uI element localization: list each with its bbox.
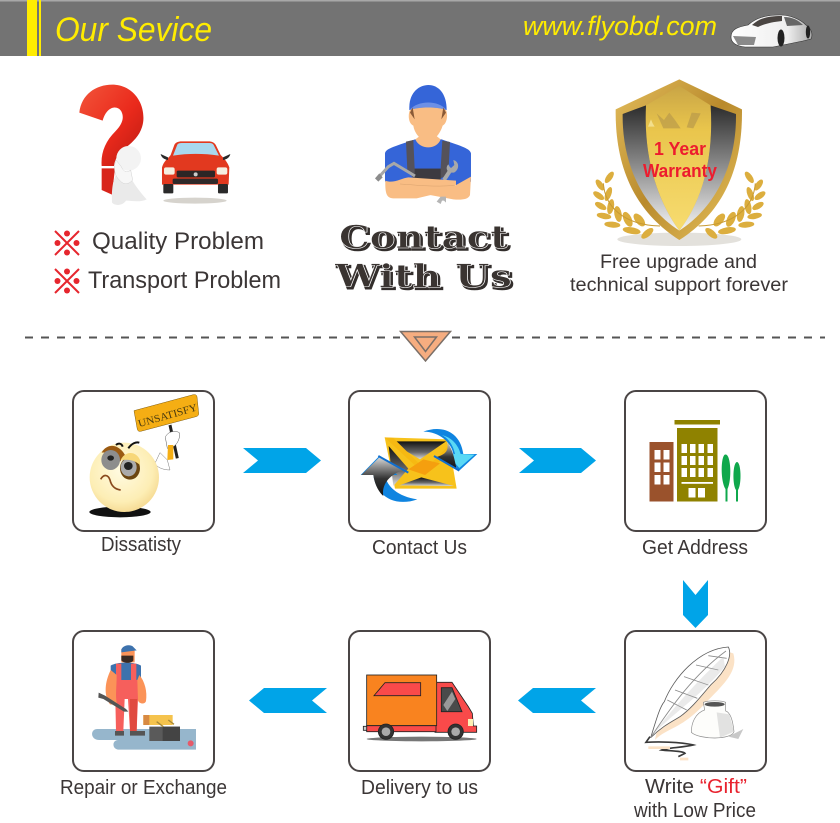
icon: repairman with toolbox xyxy=(92,645,196,750)
icon: mechanic with crossed arms xyxy=(375,85,471,204)
icon: delivery truck xyxy=(363,675,477,741)
arrow: step 4 to 5 xyxy=(518,688,596,713)
label: Get Address: Get Address xyxy=(642,537,748,559)
panel: problems xyxy=(54,85,281,294)
step: Repair or Exchange xyxy=(73,631,214,771)
panel: contact xyxy=(334,85,514,297)
icon: red asterisk bullet xyxy=(54,268,80,294)
arrow: down to write gift xyxy=(683,580,708,628)
header bar xyxy=(0,0,840,56)
text: Quality Problem: Quality Problem xyxy=(92,228,264,255)
label: with Low Price: with Low Price xyxy=(633,800,756,822)
icon: buildings and trees xyxy=(650,420,741,502)
heading: Contact With Us: Contact xyxy=(339,218,508,256)
heading: Contact With Us: With Us xyxy=(334,257,512,295)
text: UNSATISFY: UNSATISFY xyxy=(137,402,199,430)
icon: orange down triangle xyxy=(400,332,450,361)
icon: white sports car xyxy=(731,15,812,47)
icon: envelope with blue arrows xyxy=(361,429,477,502)
step: Get Address xyxy=(625,391,766,531)
text: free upgrade: Free upgrade and xyxy=(600,252,757,273)
icon: gold shield with laurel xyxy=(592,79,767,246)
label: Repair or Exchange: Repair or Exchange xyxy=(60,777,227,799)
step: Contact Us xyxy=(349,391,490,531)
heading: Contact With Us: With Us xyxy=(336,259,514,297)
text: 1 Year Warranty xyxy=(643,139,717,181)
icon: red asterisk bullet xyxy=(54,230,80,256)
icon: quill and inkwell xyxy=(646,647,743,759)
icon: unhappy face with sign xyxy=(89,395,199,517)
arrow: step 1 to 2 xyxy=(243,448,321,473)
panel: warranty xyxy=(570,79,789,296)
label: Dissatisty: Dissatisty xyxy=(101,534,181,556)
label: Contact Us: Contact Us xyxy=(372,537,467,559)
label: Write Gift: Write “Gift” xyxy=(645,776,747,798)
arrow: step 5 to 6 xyxy=(249,688,327,713)
text: 1 Year Warranty: 1 Year xyxy=(654,139,706,159)
heading: Contact With Us xyxy=(334,218,514,297)
text: Transport Problem: Transport Problem xyxy=(88,267,281,294)
step: Dissatisty xyxy=(73,391,214,531)
step: Delivery to us xyxy=(349,631,490,771)
website url: www.flyobd.com xyxy=(523,11,717,41)
text: technical support: technical support forever xyxy=(570,275,789,296)
heading: Our Sevice: Our Sevice xyxy=(55,11,212,49)
text: 1 Year Warranty: Warranty xyxy=(643,161,717,181)
step: Write Gift xyxy=(625,631,766,771)
heading: Contact With Us: Contact xyxy=(341,220,510,258)
icon: red question mark with thinking figure and car xyxy=(79,85,230,205)
arrow: step 2 to 3 xyxy=(519,448,596,473)
label: Delivery to us: Delivery to us xyxy=(361,777,478,799)
